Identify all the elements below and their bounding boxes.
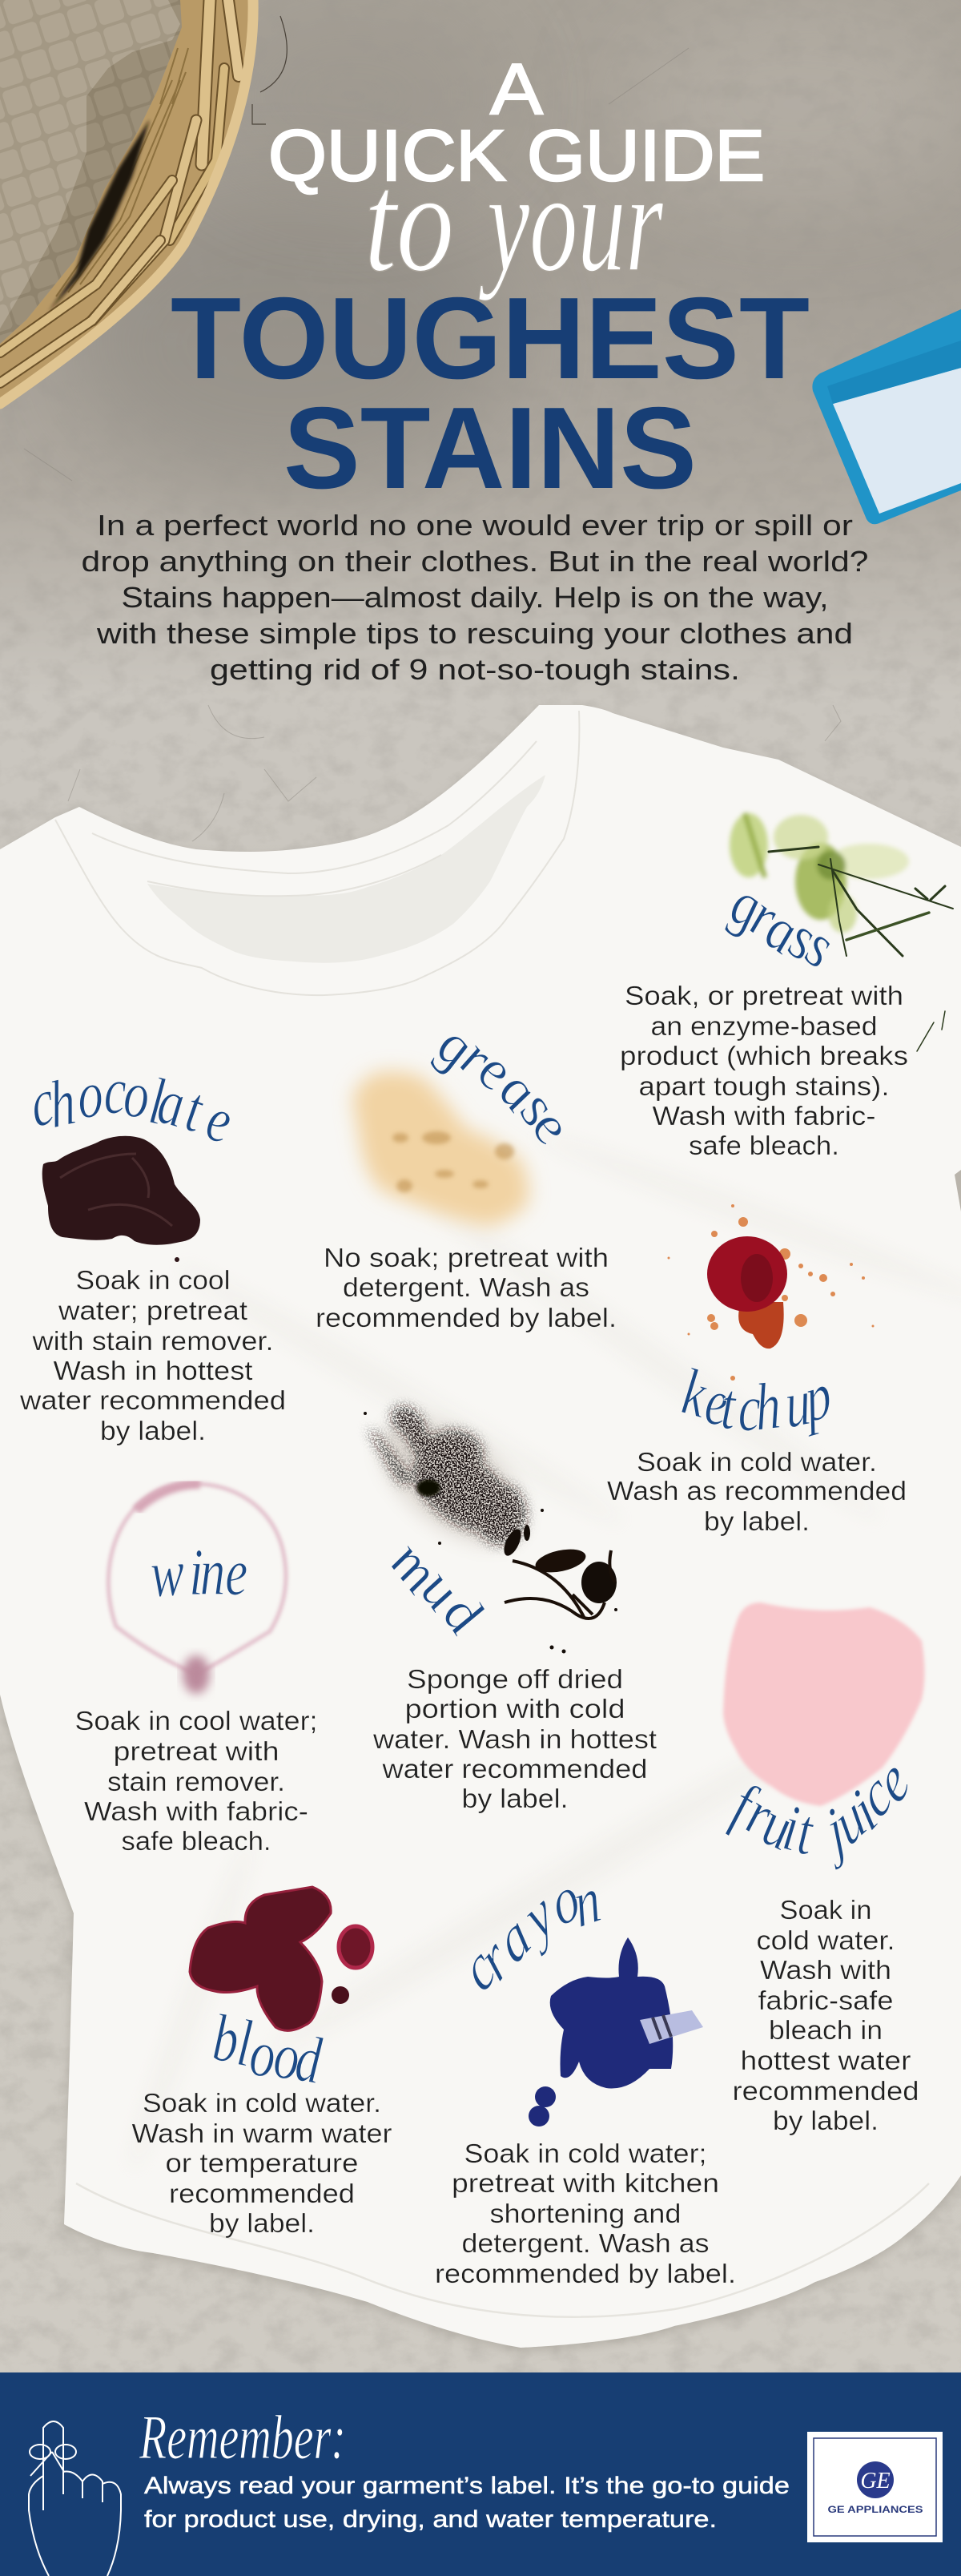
stain: mud	[359, 1396, 617, 1654]
footer panel	[0, 2372, 961, 2576]
intro paragraph	[82, 509, 868, 686]
label: crayon: crayon	[451, 1860, 606, 2006]
t-shirt	[0, 705, 961, 2352]
tip: mud: by label.	[461, 1784, 569, 1813]
icon: finger tied with string	[29, 2421, 121, 2576]
tip: wine: safe bleach.	[122, 1826, 271, 1856]
tip: grass: product (which breaks	[620, 1041, 908, 1070]
tip: mud	[372, 1664, 657, 1813]
tip: crayon: pretreat with kitchen	[452, 2168, 719, 2198]
tip: fruit juice: by label.	[773, 2106, 879, 2135]
intro paragraph: Stains happen—almost daily. Help is on the way,	[122, 581, 828, 614]
remember text: for product use, drying, and water temperature.	[144, 2506, 717, 2533]
tip: ketchup: by label.	[704, 1506, 810, 1536]
tip: grass: Soak, or pretreat with	[625, 981, 903, 1010]
label: fruit juice: fruit juice	[724, 1746, 921, 1872]
label: blood: blood	[210, 2001, 325, 2099]
label: grass: grass	[724, 864, 842, 985]
title line: A: A	[490, 50, 543, 130]
title	[171, 50, 810, 513]
logo: GE Appliances	[807, 2432, 943, 2542]
tip: chocolate	[19, 1265, 286, 1445]
label: grease: grease	[428, 1006, 580, 1160]
tip: mud: water. Wash in hottest	[372, 1724, 657, 1754]
tip: grass: apart tough stains).	[639, 1071, 889, 1101]
tip: mud: water recommended	[381, 1754, 647, 1784]
tip: grease: No soak; pretreat with	[324, 1243, 609, 1272]
tip: crayon: recommended by label.	[435, 2259, 736, 2288]
intro paragraph: In a perfect world no one would ever trip or spill or	[97, 509, 853, 542]
tip: grease: recommended by label.	[316, 1303, 617, 1332]
tip: crayon: Soak in cold water;	[464, 2139, 706, 2168]
basket with towel	[0, 0, 256, 409]
remember heading: Remember:	[139, 2402, 346, 2472]
title line: toughest: TOUGHEST	[171, 273, 810, 403]
stain: grass	[730, 813, 953, 1051]
tip: wine: Soak in cool water;	[75, 1706, 317, 1735]
tip: fruit juice: fabric-safe	[758, 1985, 894, 2015]
label: wine: wine	[149, 1535, 247, 1612]
tip: fruit juice: bleach in	[769, 2015, 883, 2045]
logo: GE Appliances: GE	[860, 2469, 891, 2493]
tip: grass	[620, 981, 908, 1160]
tip: chocolate: water recommended	[19, 1385, 286, 1415]
label: ketchup: ketchup	[678, 1354, 836, 1445]
stain: ketchup	[668, 1204, 875, 1381]
stain: blood	[190, 1887, 372, 2030]
tip: chocolate: with stain remover.	[31, 1326, 274, 1356]
tip: ketchup	[607, 1447, 907, 1536]
title line: to your	[364, 143, 663, 301]
tip: fruit juice: Soak in	[780, 1895, 871, 1925]
tip: mud: Sponge off dried	[407, 1664, 623, 1694]
logo: GE Appliances: GE APPLIANCES	[828, 2504, 923, 2515]
tip: grease: detergent. Wash as	[343, 1272, 589, 1302]
tip: crayon: detergent. Wash as	[461, 2228, 710, 2258]
remember text	[144, 2473, 790, 2533]
tip: blood	[131, 2088, 392, 2238]
tip: fruit juice: Wash with	[760, 1955, 891, 1985]
tip: chocolate: by label.	[100, 1416, 206, 1445]
tip: wine: pretreat with	[114, 1736, 279, 1766]
tip: fruit juice: cold water.	[756, 1925, 895, 1955]
tip: grass: an enzyme-based	[650, 1011, 878, 1041]
title line: stains: STAINS	[283, 383, 697, 513]
tip: crayon	[435, 2139, 736, 2288]
tip: mud: portion with cold	[405, 1694, 625, 1723]
intro paragraph: drop anything on their clothes. But in the real world?	[82, 545, 868, 578]
label: chocolate: chocolate	[24, 1054, 239, 1160]
tip: wine: Wash with fabric-	[84, 1796, 308, 1826]
tip: fruit juice: recommended	[732, 2076, 919, 2106]
tip: blood: recommended	[169, 2179, 355, 2208]
tip: chocolate: water; pretreat	[58, 1296, 247, 1325]
title line: to your: your	[479, 143, 663, 301]
tip: wine	[75, 1706, 317, 1856]
label: mud: mud	[382, 1522, 493, 1651]
remember text: Always read your garment’s label. It’s the go-to guide	[144, 2473, 790, 2499]
stain: fruit juice	[723, 1602, 924, 1806]
tip: grass: Wash with fabric-	[652, 1101, 876, 1131]
tip: blood: Soak in cold water.	[143, 2088, 381, 2118]
tip: chocolate: Wash in hottest	[53, 1356, 253, 1385]
tip: ketchup: Soak in cold water.	[637, 1447, 877, 1477]
tip: blood: or temperature	[165, 2148, 359, 2178]
title line: quick guide: QUICK GUIDE	[268, 116, 765, 196]
stain: wine ring	[108, 1484, 286, 1694]
tip: blood: by label.	[209, 2208, 315, 2238]
tip: fruit juice	[732, 1895, 919, 2135]
tip: chocolate: Soak in cool	[75, 1265, 231, 1295]
stain: chocolate	[42, 1136, 200, 1262]
tip: wine: stain remover.	[107, 1767, 285, 1796]
tip: grease	[316, 1243, 617, 1332]
blue scoop with detergent	[812, 309, 961, 524]
title line: to your: to	[364, 143, 454, 301]
stain: crayon	[529, 1937, 703, 2127]
tip: fruit juice: hottest water	[740, 2046, 911, 2075]
stain: grease	[352, 1071, 529, 1226]
intro paragraph: getting rid of 9 not-so-tough stains.	[210, 653, 740, 686]
tip: blood: Wash in warm water	[131, 2118, 392, 2148]
tip: grass: safe bleach.	[689, 1131, 839, 1160]
tip: ketchup: Wash as recommended	[607, 1476, 907, 1506]
tip: crayon: shortening and	[490, 2199, 681, 2228]
intro paragraph: with these simple tips to rescuing your clothes and	[96, 617, 853, 650]
